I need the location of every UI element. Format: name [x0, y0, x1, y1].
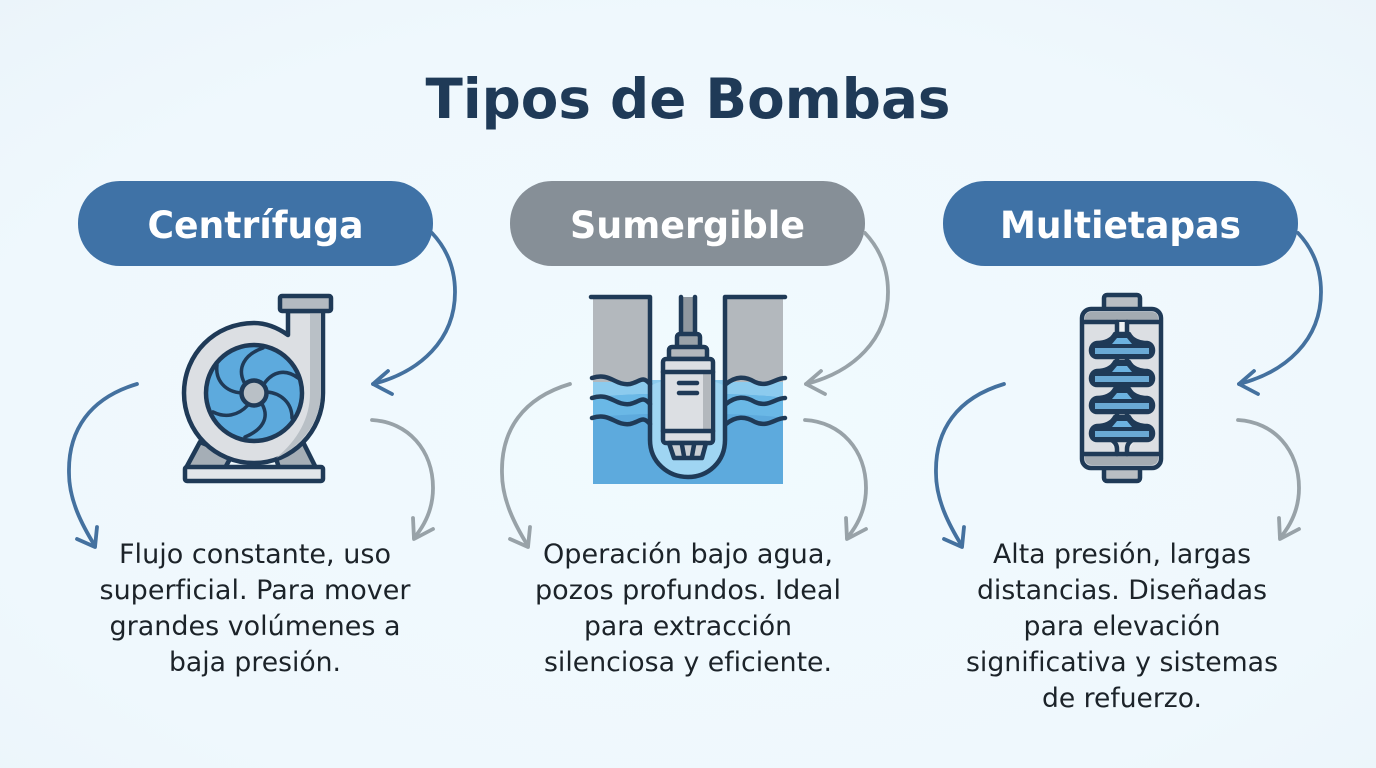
panel: Sumergible — [502, 181, 888, 678]
arrow: icon to text right — [805, 420, 866, 539]
arrow: heading to icon — [373, 233, 455, 394]
impeller stage 4 — [1091, 417, 1153, 440]
description: Centrífuga: baja presión. — [169, 647, 341, 678]
arrow: heading to icon — [1239, 233, 1321, 394]
description: Multietapas: para elevación — [1024, 611, 1220, 642]
icon: submersible pump — [591, 297, 785, 484]
heading pill: Sumergible — [510, 181, 865, 266]
description: Multietapas: significativa y sistemas — [966, 647, 1278, 678]
arrow: icon to text right — [1238, 420, 1299, 539]
description: Centrífuga: superficial. Para mover — [100, 575, 411, 606]
heading pill: Centrífuga: Centrífuga — [148, 204, 364, 247]
description: Centrífuga: grandes volúmenes a — [110, 611, 400, 642]
heading pill: Multietapas: Multietapas — [1000, 204, 1241, 247]
arrow: icon to text left — [936, 384, 1004, 547]
description: Multietapas — [966, 539, 1278, 714]
heading pill: Centrífuga — [78, 181, 433, 266]
panel: Multietapas — [936, 181, 1321, 714]
description: Multietapas: de refuerzo. — [1042, 683, 1202, 714]
description: Centrífuga: Flujo constante, uso — [119, 539, 391, 570]
description: Multietapas: Alta presión, largas — [993, 539, 1251, 570]
impeller stage 2 — [1091, 362, 1153, 385]
panel: Centrífuga — [69, 181, 455, 678]
description: Centrífuga — [100, 539, 411, 678]
icon: centrifugal pump — [184, 296, 331, 481]
impeller stage 1 — [1091, 334, 1153, 357]
description: Multietapas: distancias. Diseñadas — [977, 575, 1267, 606]
arrow: icon to text right — [372, 420, 433, 539]
description: Sumergible: Operación bajo agua, — [543, 539, 833, 570]
arrow: icon to text left — [502, 384, 570, 547]
impeller stage 3 — [1091, 389, 1153, 412]
description: Sumergible: pozos profundos. Ideal — [535, 575, 841, 606]
arrow: heading to icon — [806, 233, 888, 394]
heading pill: Sumergible: Sumergible — [570, 204, 805, 247]
arrow: icon to text left — [69, 384, 137, 547]
title: Tipos de Bombas — [426, 67, 950, 131]
icon: multistage pump — [1082, 295, 1161, 481]
heading pill: Multietapas — [943, 181, 1298, 266]
description: Sumergible: silenciosa y eficiente. — [544, 647, 832, 678]
description: Sumergible: para extracción — [584, 611, 792, 642]
description: Sumergible — [535, 539, 841, 678]
